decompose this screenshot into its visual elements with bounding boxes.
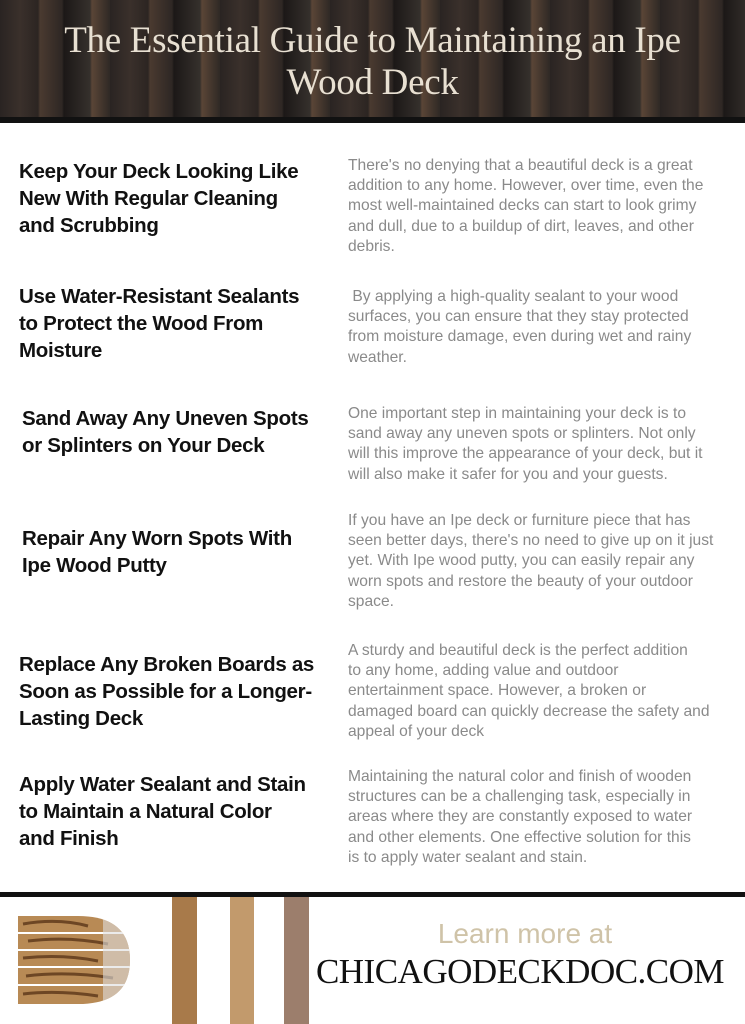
section 6 text: is to apply water sealant and stain.: [348, 849, 587, 866]
section 3 text: One important step in maintaining your deck is to: [348, 405, 686, 422]
section 6 text: and other elements. One effective solution for this: [348, 829, 691, 846]
section 5 text: entertainment space. However, a broken or: [348, 682, 646, 699]
section 4 text: space.: [348, 593, 394, 610]
section 6 text: Maintaining the natural color and finish of wooden: [348, 768, 691, 785]
section 5 text: damaged board can quickly decrease the safety and: [348, 703, 710, 720]
section 6 text: areas where they are constantly exposed to water: [348, 808, 692, 825]
section 3 heading: or Splinters on Your Deck: [22, 434, 264, 457]
section 3 text: [348, 405, 703, 483]
section 6 heading: to Maintain a Natural Color: [19, 800, 272, 823]
section 2 heading: Moisture: [19, 339, 102, 362]
section 2 text: weather.: [348, 349, 407, 366]
section 5 text: [348, 642, 710, 740]
section 2 text: By applying a high-quality sealant to your wood: [352, 288, 678, 305]
title: Wood Deck: [286, 62, 459, 103]
section 2 heading: Use Water-Resistant Sealants: [19, 285, 299, 308]
section 1 text: addition to any home. However, over time, even the: [348, 177, 703, 194]
section 5 text: to any home, adding value and outdoor: [348, 662, 618, 679]
section 2 text: [348, 288, 692, 366]
section 1 text: debris.: [348, 238, 395, 255]
section 2 text: from moisture damage, even during wet and rainy: [348, 328, 691, 345]
section 5 heading: Lasting Deck: [19, 707, 143, 730]
section 5 heading: Soon as Possible for a Longer-: [19, 680, 312, 703]
section 4 heading: [22, 527, 292, 577]
section 5 text: A sturdy and beautiful deck is the perfect addition: [348, 642, 688, 659]
section 6 heading: and Finish: [19, 827, 119, 850]
section 1 text: and dull, due to a buildup of dirt, leaves, and other: [348, 218, 694, 235]
section 6 text: [348, 768, 692, 866]
section 4 heading: Repair Any Worn Spots With: [22, 527, 292, 550]
section 5 heading: Replace Any Broken Boards as: [19, 653, 314, 676]
section 1 text: There's no denying that a beautiful deck is a great: [348, 157, 693, 174]
section 2 heading: [19, 285, 299, 362]
website: CHICAGODECKDOC.COM: [316, 952, 724, 991]
section 4 text: [348, 512, 714, 610]
section 2 text: surfaces, you can ensure that they stay protected: [348, 308, 689, 325]
section 1 heading: Keep Your Deck Looking Like: [19, 160, 298, 183]
title: The Essential Guide to Maintaining an Ipe: [64, 20, 681, 61]
section 4 heading: Ipe Wood Putty: [22, 554, 167, 577]
section 5 heading: [19, 653, 314, 730]
section 3 text: will also make it safer for you and your guests.: [348, 466, 668, 483]
section 1 heading: [19, 160, 298, 237]
logo D: [18, 916, 130, 1004]
section 4 text: yet. With Ipe wood putty, you can easily repair any: [348, 552, 694, 569]
section 4 text: If you have an Ipe deck or furniture piece that has: [348, 512, 690, 529]
section 6 text: structures can be a challenging task, especially in: [348, 788, 690, 805]
section 4 text: seen better days, there's no need to give up on it just: [348, 532, 713, 549]
section 1 text: most well-maintained decks can start to look grimy: [348, 197, 696, 214]
learn more text: Learn more at: [438, 918, 612, 949]
color stripes: [172, 897, 197, 1024]
section 1 text: [348, 157, 703, 255]
section 2 heading: to Protect the Wood From: [19, 312, 263, 335]
section 1 heading: New With Regular Cleaning: [19, 187, 278, 210]
section 6 heading: Apply Water Sealant and Stain: [19, 773, 306, 796]
section 5 text: appeal of your deck: [348, 723, 484, 740]
header banner: [0, 0, 745, 117]
section 3 heading: Sand Away Any Uneven Spots: [22, 407, 308, 430]
title: [64, 20, 681, 103]
section 1 heading: and Scrubbing: [19, 214, 159, 237]
section 3 text: will this improve the appearance of your deck, but it: [348, 445, 703, 462]
section 3 heading: [22, 407, 308, 457]
section 4 text: worn spots and restore the beauty of your outdoor: [348, 573, 693, 590]
section 3 text: sand away any uneven spots or splinters. Not only: [348, 425, 696, 442]
footer: [18, 897, 724, 1024]
section 6 heading: [19, 773, 306, 850]
